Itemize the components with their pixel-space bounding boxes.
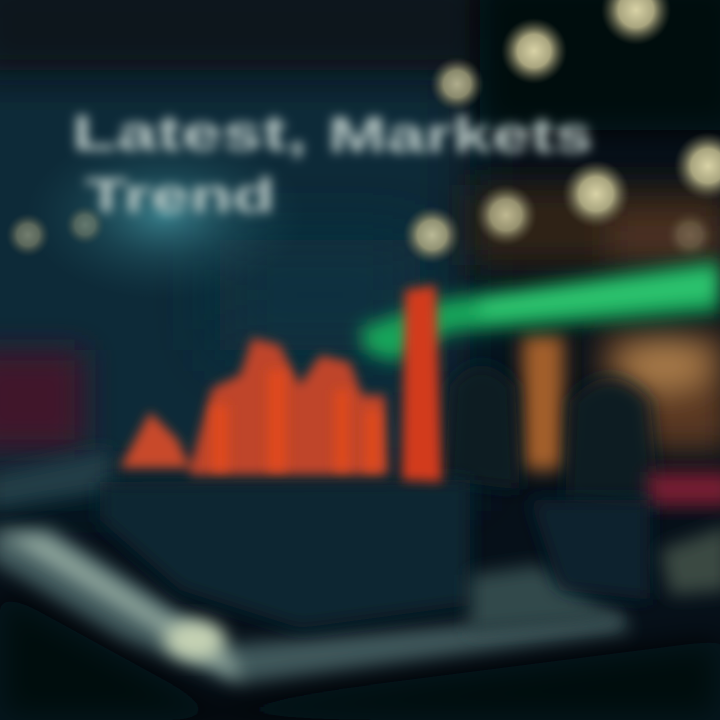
red bar chart — [120, 285, 442, 482]
orange column — [522, 335, 564, 470]
headline text, blurred: Markets — [328, 107, 593, 163]
laptop deck — [0, 450, 720, 685]
headline text, blurred — [72, 105, 593, 223]
green ticker band — [360, 260, 720, 362]
headline text, blurred: Trend — [85, 170, 275, 223]
bottom vignette — [0, 590, 720, 720]
dark silhouettes of people — [445, 365, 660, 510]
maroon object — [648, 472, 720, 506]
warm interior background — [470, 185, 720, 450]
ceiling lights — [6, 0, 720, 264]
maroon wall panel — [0, 350, 85, 450]
headline text, blurred: Latest, — [72, 105, 307, 161]
teal glow behind headline — [25, 130, 305, 300]
